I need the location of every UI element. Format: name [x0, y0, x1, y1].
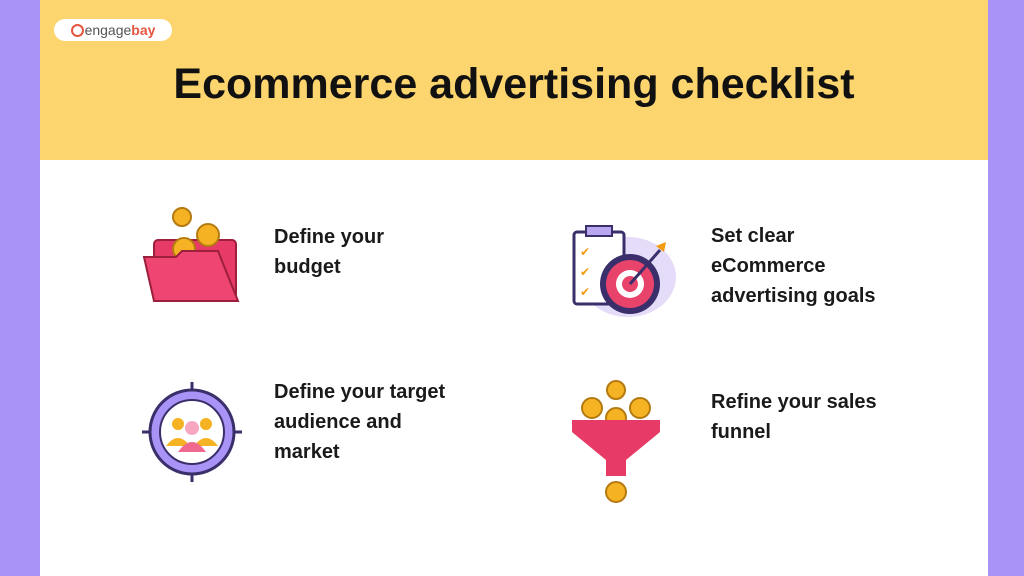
text: goals [711, 225, 876, 307]
text: funnel: Refine your sales [711, 391, 877, 413]
logo: engagebay [85, 22, 155, 38]
text: goals: advertising goals [711, 285, 876, 307]
icon: clipboard target: ✔ [580, 285, 590, 299]
title: Ecommerce advertising checklist [173, 60, 855, 108]
text: audience: audience and [274, 411, 402, 433]
icon: clipboard target [572, 225, 676, 317]
text: budget: Define your [274, 226, 384, 248]
text: goals: Set clear [711, 225, 794, 247]
text: budget [274, 226, 384, 278]
text: goals: eCommerce [711, 255, 826, 277]
logo [54, 19, 172, 41]
icon: clipboard target: ✔ [580, 265, 590, 279]
icon: target audience [142, 382, 242, 482]
text: funnel [711, 391, 877, 443]
icon: folder with coins [142, 207, 240, 302]
text: audience: market [274, 441, 340, 463]
text: audience: Define your target [274, 381, 445, 403]
text: funnel: funnel [711, 421, 771, 443]
text: audience [274, 381, 445, 463]
icon: funnel with coins [572, 380, 660, 503]
text: budget: budget [274, 256, 341, 278]
header band [40, 0, 988, 160]
icon: clipboard target: ✔ [580, 245, 590, 259]
